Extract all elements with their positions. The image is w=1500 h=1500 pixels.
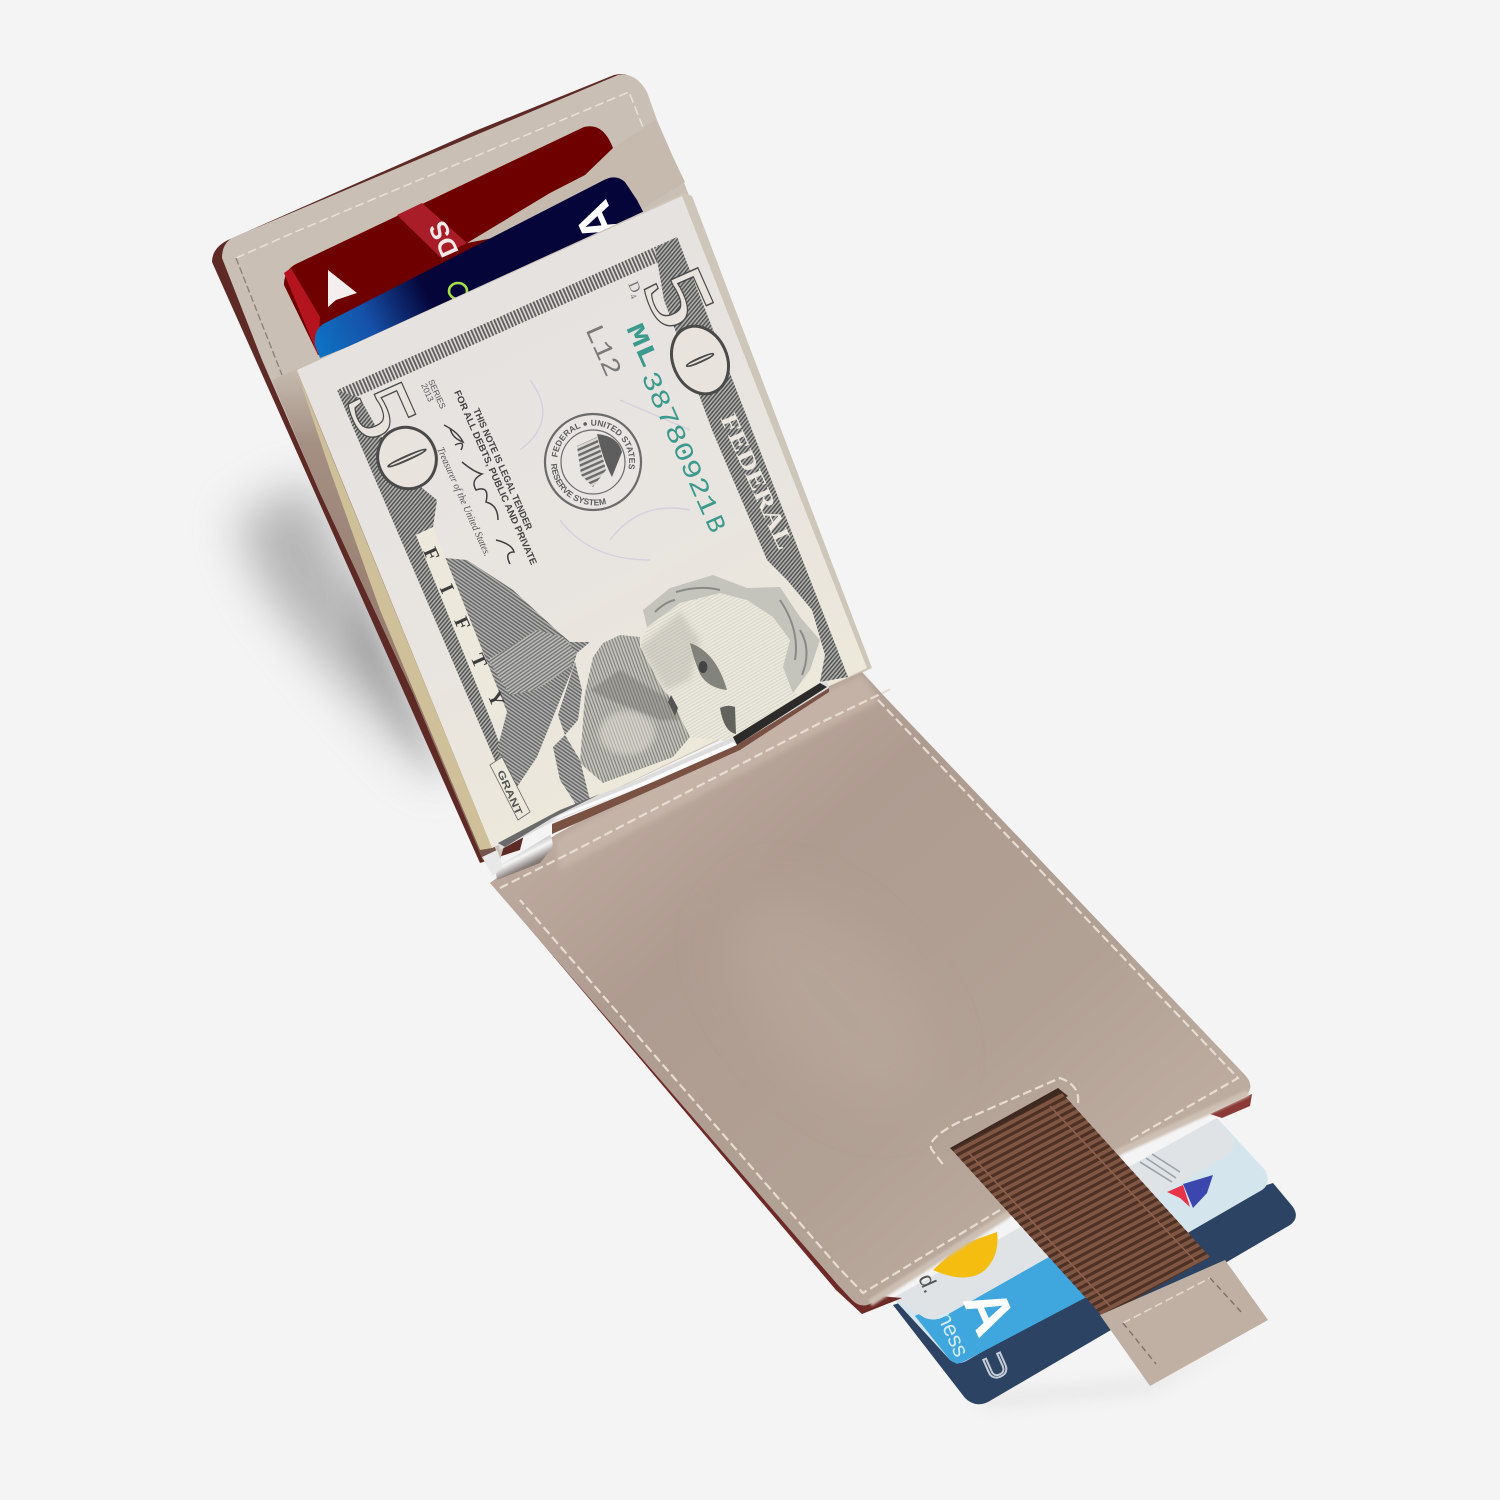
seal lower text: RESERVE SYSTEM bbox=[551, 464, 606, 506]
eye pupil bbox=[698, 661, 708, 673]
clip silver bar bbox=[498, 682, 829, 850]
strap slot bbox=[950, 1088, 1068, 1156]
burgundy outer edge bbox=[212, 74, 686, 863]
nose bbox=[668, 695, 678, 716]
bottom cards bbox=[893, 1118, 1296, 1404]
lower pocket strip bbox=[272, 368, 500, 860]
GRANT ribbon bbox=[490, 757, 530, 820]
hologram stripes bbox=[1140, 1154, 1180, 1182]
hair strands bbox=[655, 588, 807, 675]
legal tender text: THIS NOTE IS LEGAL TENDER bbox=[470, 407, 534, 532]
back panel of wallet bbox=[212, 74, 690, 863]
pale card body bbox=[893, 1118, 1268, 1363]
lower leather panel bbox=[490, 672, 1250, 1306]
serial number bbox=[619, 319, 731, 538]
taupe leather interior bbox=[222, 75, 690, 860]
hair bbox=[643, 575, 820, 693]
denomination ribbon bbox=[416, 527, 507, 723]
tab side stitching bbox=[1123, 1278, 1243, 1364]
plate letter: D₄ bbox=[624, 279, 645, 300]
portrait of Grant bbox=[416, 527, 820, 820]
collar shadow bbox=[558, 662, 582, 735]
moustache shading bbox=[590, 670, 680, 720]
seal ring text: FEDERAL ● UNITED STATES bbox=[552, 420, 635, 470]
series label: 2013 bbox=[419, 382, 436, 403]
card logo letter A: A bbox=[563, 193, 632, 251]
brow and eye bbox=[690, 643, 727, 690]
soft leather mottling bbox=[690, 857, 970, 1143]
card text: DS: DS bbox=[422, 217, 464, 262]
serial number: B bbox=[698, 511, 731, 538]
green logo ring bbox=[449, 283, 467, 299]
card red accents bbox=[397, 203, 467, 257]
clip brown reflection bbox=[552, 688, 829, 834]
cast shadow of wallet bbox=[235, 480, 1250, 1408]
right border bbox=[655, 237, 848, 682]
money clip bbox=[482, 682, 829, 880]
navy card in middle slot bbox=[315, 177, 650, 358]
card word fragment: ness bbox=[932, 1308, 974, 1360]
card letter A: A bbox=[950, 1278, 1029, 1345]
left border bbox=[337, 390, 520, 803]
federal reserve seal bbox=[544, 412, 642, 512]
stitching top bbox=[236, 92, 672, 258]
numeral 50 top right bbox=[624, 252, 739, 403]
stitching bbox=[500, 688, 1238, 1293]
cravat bbox=[553, 735, 590, 806]
numeral 0 oval bbox=[368, 418, 446, 498]
suede tab bbox=[1100, 1260, 1268, 1386]
card letter d: d. bbox=[913, 1270, 944, 1297]
banknote printed border bbox=[337, 237, 848, 803]
coat bbox=[445, 558, 590, 787]
numeral 5: 5 bbox=[328, 367, 437, 453]
ribbon stitching bbox=[968, 1106, 1196, 1306]
bank flag red bbox=[1167, 1185, 1190, 1207]
ribbon ribs bbox=[952, 1093, 1210, 1314]
burgundy edge of lower panel bbox=[492, 884, 1252, 1314]
numeral 0 oval bbox=[661, 317, 739, 403]
banknote paper bbox=[297, 193, 872, 848]
navy card bbox=[893, 1183, 1296, 1404]
hologram yellow bbox=[933, 1232, 998, 1278]
series label: SERIES bbox=[426, 378, 448, 411]
numeral 0: 0 bbox=[675, 347, 724, 374]
clip highlight bbox=[552, 742, 737, 821]
serial number: ML bbox=[619, 319, 664, 372]
lighter hinge fold bbox=[555, 675, 880, 870]
elastic pull strap bbox=[950, 1088, 1268, 1386]
red card in upper slot bbox=[284, 126, 640, 355]
face bbox=[640, 593, 800, 742]
lapel bbox=[488, 630, 577, 695]
ribbon base bbox=[952, 1093, 1210, 1317]
page stack of bills bbox=[297, 372, 492, 850]
clip reflection of note bbox=[498, 794, 600, 847]
pocket lip over red card bbox=[467, 120, 685, 243]
rim light bbox=[870, 1093, 1248, 1303]
numeral 0: 0 bbox=[373, 441, 440, 476]
top border bbox=[337, 237, 683, 402]
seal eagle bbox=[597, 434, 622, 477]
GRANT name: GRANT bbox=[494, 769, 524, 817]
clip bullet end bbox=[495, 835, 553, 880]
legal tender text: FOR ALL DEBTS, PUBLIC AND PRIVATE bbox=[451, 389, 539, 567]
navy card letter: U bbox=[978, 1345, 1014, 1387]
FEDERAL label: FEDERAL bbox=[715, 410, 798, 554]
plate code L12: L12 bbox=[578, 320, 627, 382]
faint security pattern bbox=[520, 380, 690, 560]
tab stitching bbox=[1123, 1278, 1210, 1323]
serial number: 38780921 bbox=[634, 367, 724, 520]
signatures bbox=[444, 425, 514, 564]
beard bbox=[580, 635, 690, 783]
second eye bbox=[720, 706, 736, 734]
numeral 5: 5 bbox=[624, 252, 736, 342]
numeral 50 left bbox=[328, 367, 446, 498]
hinge rim bbox=[482, 850, 503, 876]
clip dark tip bbox=[733, 683, 827, 745]
forehead shading bbox=[640, 612, 700, 690]
denomination word: FIFTY bbox=[418, 544, 509, 711]
bank flag blue bbox=[1183, 1175, 1213, 1208]
blue band bbox=[915, 1240, 1100, 1364]
beard highlight bbox=[599, 711, 655, 755]
treasurer title: Treasurer of the United States. bbox=[434, 446, 492, 558]
stitching left bbox=[236, 258, 282, 375]
silver panel bbox=[893, 1118, 1234, 1320]
seal shield bbox=[577, 437, 606, 487]
